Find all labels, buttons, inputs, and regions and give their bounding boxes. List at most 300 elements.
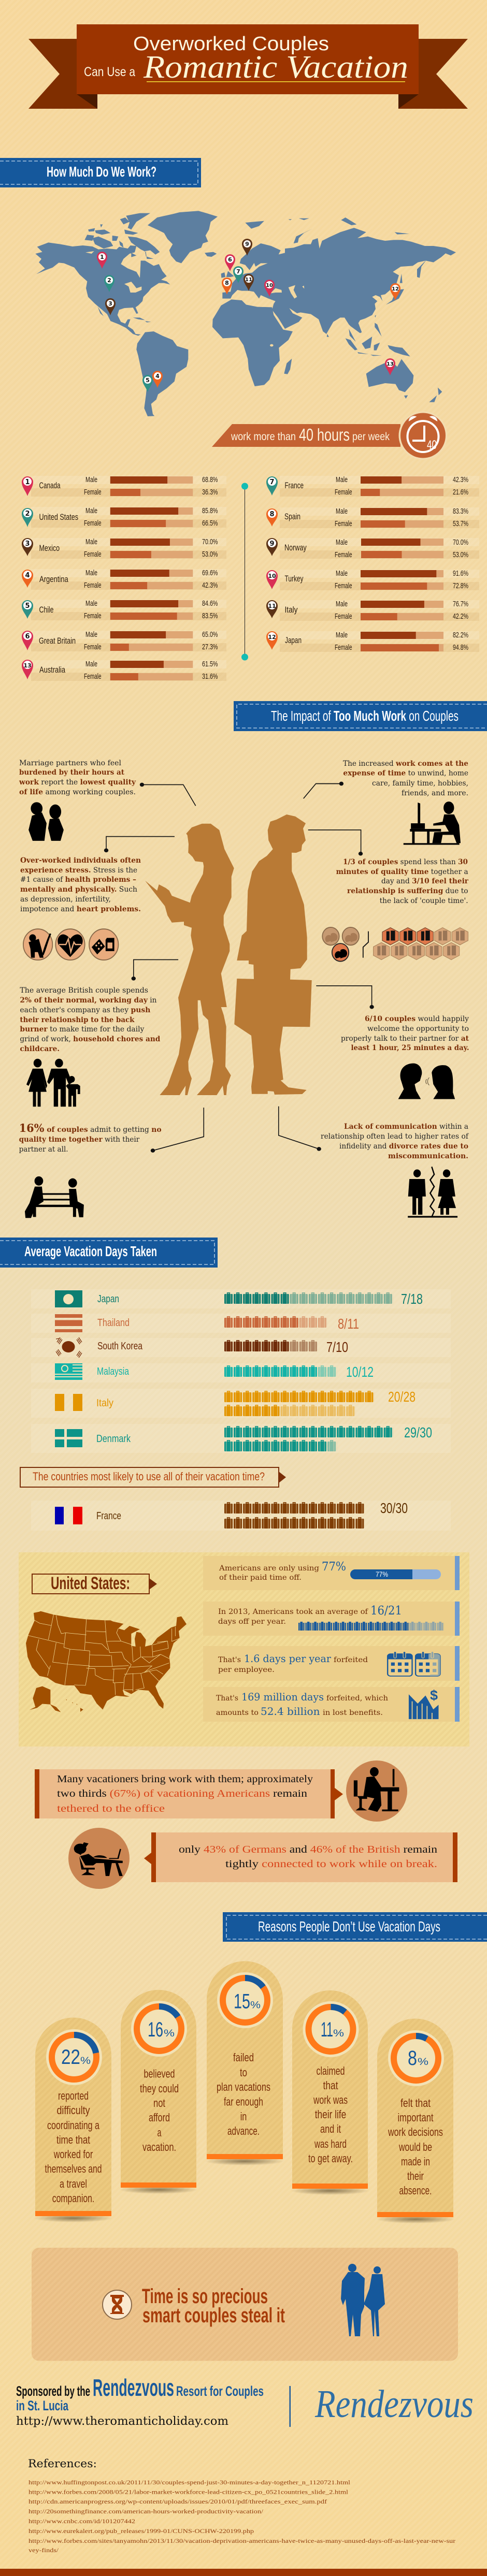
icon: falling chart — [409, 1687, 438, 1719]
text: lack of communication: miscommunication. — [388, 1152, 468, 1160]
heading: reasons people don't use vacation days — [223, 1912, 487, 1942]
arch: 22 percent: themselves and — [45, 2162, 102, 2175]
references: http://www.forbes.com/2008/05/21/labor-market-workforce-lead-citizen-cx_po_0521countries_slide_2.html — [28, 2488, 349, 2496]
arch: 11 percent — [291, 1990, 369, 2195]
map pins: 5 — [146, 377, 150, 384]
panel: male/female hours by country, left column: Female — [84, 519, 102, 528]
row: France: France — [96, 1510, 121, 1522]
row: France — [31, 1500, 451, 1531]
panel: male/female hours by country, right column: Male — [336, 569, 348, 578]
row: Thailand: Thailand — [97, 1317, 130, 1329]
panel: male/female hours by country, left column: Male — [85, 569, 97, 577]
panel: male/female hours by country, left column: Male — [85, 475, 97, 484]
map pins: 6 — [228, 256, 232, 263]
title script: Romantic Vacation — [143, 50, 408, 85]
row: South Korea: 7/10 — [326, 1339, 348, 1355]
arch: 15 percent: plan vacations — [217, 2080, 270, 2093]
text: lack of communication: relationship often lead to higher rates of — [321, 1132, 469, 1141]
arch: 22 percent: time that — [56, 2133, 90, 2146]
icon: calendars — [388, 1652, 440, 1676]
icon: family — [26, 1059, 80, 1107]
card: 1.6 days per year — [203, 1646, 460, 1681]
map: USA — [26, 1611, 187, 1712]
panel: male/female hours by country, right column: 42.2% — [453, 612, 468, 621]
heading: how much do we work — [0, 158, 201, 187]
man figure — [234, 814, 312, 1095]
panel: United States — [19, 1552, 469, 1747]
card: 16 of 21 days: 16/21 — [370, 1604, 402, 1618]
panel: male/female hours by country, right column: Female — [335, 643, 352, 652]
text: british couple: The average British couple spends — [20, 986, 148, 995]
panel: male/female hours by country, left column: 66.5% — [202, 519, 218, 528]
arch: 15 percent: in — [240, 2110, 247, 2123]
icons: stress, heart, pills — [23, 929, 118, 960]
panel: male/female hours by country, left column: Female — [84, 581, 102, 590]
references: http://www.huffingtonpost.co.uk/2011/11/30/couples-spend-just-30-minutes-a-day-together_n_1120721.html — [28, 2479, 351, 2486]
text: british couple — [20, 986, 161, 1053]
map pins: 10 — [266, 283, 273, 288]
panel: male/female hours by country, left column: Australia — [39, 665, 65, 675]
panel: male/female hours by country, left column: 70.0% — [202, 537, 218, 546]
panel: male/female hours by country, right column: Male — [336, 475, 348, 484]
text: british couple: each other's company as they push — [20, 1006, 150, 1014]
arch: 22 percent: difficulty — [57, 2104, 90, 2117]
title ribbon — [28, 24, 468, 109]
panel: male/female hours by country, left column: 83.5% — [202, 612, 218, 620]
panel: male/female hours by country, left column: 36.3% — [202, 488, 218, 497]
text: one third of couples: the lack of 'couple time'. — [380, 897, 468, 905]
text: six of ten couples: welcome the opportunity to — [367, 1025, 469, 1033]
timeline divider — [241, 483, 248, 661]
text: one third of couples: minutes of quality time together a — [336, 868, 468, 876]
arch: 15 percent: failed — [233, 2051, 254, 2064]
text: six of ten couples — [341, 1015, 469, 1052]
world map — [35, 211, 456, 416]
connector lines — [104, 782, 374, 1153]
map pins — [97, 239, 400, 392]
arch: 22 percent: reported — [58, 2089, 89, 2102]
panel: male/female hours by country, left column: 85.8% — [202, 506, 218, 515]
panel: male/female hours by country, left column: 68.8% — [202, 475, 218, 484]
panel: male/female hours by country, left column: Female — [84, 550, 102, 559]
panel: male/female hours by country, right column: 82.2% — [453, 631, 468, 639]
callout: tethered to the office — [35, 1769, 343, 1818]
panel: male/female hours by country, right column: 83.3% — [453, 507, 468, 516]
icon: hourglass — [103, 2290, 132, 2319]
map pins: 1 — [100, 254, 104, 260]
sponsor text: Sponsored by the — [16, 2383, 90, 2399]
references: http://cdn.americanprogress.org/wp-content/uploads/issues/2010/01/pdf/threefaces_exec_sum.pdf — [28, 2498, 327, 2505]
arch: 8 percent: important — [398, 2111, 433, 2124]
arch: 11 percent: % — [333, 2028, 344, 2039]
panel: male/female hours by country, right column — [266, 475, 479, 652]
row: Italy — [31, 1389, 451, 1418]
arch: 8 percent: their — [407, 2170, 424, 2182]
map pins: 9 — [245, 241, 249, 248]
text: stress — [20, 856, 141, 913]
panel: male/female hours by country, left column: 84.6% — [202, 599, 218, 608]
references: vey-finds/ — [28, 2546, 59, 2554]
text: marriage partners: burdened by their hours at — [19, 768, 125, 777]
panel: male/female hours by country, left column: Canada — [39, 481, 61, 490]
panel: male/female hours by country, left column: 3 — [25, 540, 30, 548]
icon: couple walking — [341, 2264, 385, 2336]
arch: 15 percent: to — [240, 2066, 247, 2079]
row: South Korea: South Korea — [97, 1341, 143, 1352]
row: Thailand: 8/11 — [338, 1316, 359, 1332]
40 hours banner — [212, 424, 400, 447]
sponsor text: in St. Lucia — [16, 2398, 69, 2413]
map pins: 11 — [245, 277, 252, 283]
text: increased work — [343, 760, 468, 797]
text: british couple: 2% of their normal, working day in — [20, 996, 156, 1005]
panel: male/female hours by country, left column — [22, 475, 226, 681]
panel: male/female hours by country, right column: France — [285, 481, 304, 490]
panel: male/female hours by country, left column: 69.6% — [202, 569, 218, 577]
panel: male/female hours by country, left column: 1 — [25, 478, 30, 486]
arch: 8 percent: 8 — [408, 2047, 417, 2070]
card: 77 percent of paid time off — [203, 1556, 460, 1590]
panel: male/female hours by country, left column: 6 — [25, 633, 30, 641]
panel: male/female hours by country, right column: 7 — [269, 478, 275, 486]
arch: 11 percent: and it — [320, 2122, 341, 2135]
text: marriage partners: Marriage partners who feel — [19, 759, 122, 767]
card: 16 of 21 days: days off per year. — [218, 1618, 286, 1626]
arch: 11 percent: 11 — [321, 2018, 333, 2041]
arch: 22 percent: a travel — [60, 2177, 87, 2190]
card: 1.6 days per year: forfeited — [334, 1656, 368, 1664]
panel: male/female hours by country, right column: 9 — [269, 540, 275, 548]
panel: male/female hours by country, left column: 27.3% — [202, 643, 218, 651]
arch: 8 percent: felt that — [400, 2097, 431, 2109]
sponsor text — [16, 2374, 264, 2428]
callout: tethered to the office: tethered to the office — [57, 1803, 165, 1814]
arch: 15 percent: 15 — [234, 1990, 250, 2013]
text: one third of couples: day and 3/10 feel their — [381, 877, 469, 885]
panel: male/female hours by country, left column: Argentina — [39, 574, 68, 584]
text: increased work: friends, and more. — [402, 789, 468, 797]
icon: couple on bench — [25, 1176, 84, 1218]
panel: male/female hours by country, left column: Male — [85, 506, 97, 515]
arch: 16 percent: afford — [149, 2111, 170, 2124]
arch: 22 percent: % — [80, 2056, 91, 2066]
references: References: — [28, 2457, 97, 2470]
card: 169 million days forfeited: 52.4 billion — [261, 1705, 320, 1718]
arch: 16 percent: % — [164, 2028, 175, 2039]
arch: 16 percent: vacation. — [142, 2141, 176, 2153]
card: 77 percent of paid time off: of their paid time off. — [219, 1574, 302, 1582]
panel: male/female hours by country, right column: 76.7% — [453, 600, 468, 608]
slogan: smart couples steal it — [142, 2304, 285, 2327]
panel: male/female hours by country, right column: Italy — [285, 605, 298, 615]
panel: male/female hours by country, left column: Female — [84, 672, 102, 681]
panel: male/female hours by country, left column: Great Britain — [39, 636, 76, 646]
panel: male/female hours by country, left column: 2 — [25, 510, 30, 518]
text: marriage partners — [19, 759, 136, 796]
row: Malaysia — [31, 1363, 451, 1382]
arch: 16 percent: 16 — [148, 2018, 163, 2041]
arch: 22 percent: coordinating a — [47, 2119, 100, 2132]
panel: male/female hours by country, right column: Male — [336, 600, 348, 608]
callout: countries most likely: The countries most likely to use all of their vacation time? — [33, 1470, 265, 1483]
heading: how much do we work: How Much Do We Work? — [47, 164, 156, 180]
title line 1: Overworked Couples — [133, 33, 329, 55]
callout: tethered to the office: two thirds (67%) of vacationing Americans remain — [57, 1788, 307, 1799]
row: Denmark: Denmark — [96, 1433, 131, 1445]
text: one third of couples — [336, 858, 469, 905]
row: Italy: 20/28 — [388, 1389, 416, 1405]
map pins: 3 — [108, 300, 112, 307]
text: british couple: childcare. — [20, 1045, 60, 1053]
icon: falling chart: $ — [430, 1687, 438, 1703]
panel: male/female hours by country, right column: 21.6% — [453, 488, 468, 497]
map pins: 7 — [236, 268, 240, 275]
row: France: 30/30 — [380, 1500, 408, 1516]
panel: male/female hours by country, left column: Female — [84, 488, 102, 497]
footer bar — [0, 2569, 487, 2576]
panel: male/female hours by country, right column: Norway — [284, 543, 307, 552]
panel: male/female hours by country, right column: Female — [335, 550, 352, 559]
callout: connected while on break: tightly connected to work while on break. — [225, 1858, 437, 1870]
panel: male/female hours by country, right column: 72.8% — [453, 581, 468, 590]
text: 16 percent: quality time together with their — [19, 1136, 139, 1144]
arch: 11 percent: to get away. — [308, 2152, 353, 2165]
woman figure — [145, 824, 234, 1095]
panel: time is so precious — [32, 2248, 458, 2361]
text: stress: as depression, infertility, — [20, 895, 111, 904]
row: South Korea — [31, 1337, 451, 1358]
row: Thailand — [31, 1314, 451, 1333]
callout: tethered to the office: Many vacationers bring work with them; approximately — [57, 1773, 313, 1785]
arch: 8 percent: % — [418, 2057, 428, 2068]
arch: 15 percent: advance. — [227, 2124, 260, 2137]
arch: 16 percent: not — [153, 2097, 165, 2109]
panel: male/female hours by country, left column: Chile — [39, 605, 54, 615]
card: 16 of 21 days: In 2013, Americans took an average of — [218, 1608, 369, 1616]
callout: United States: United States: — [51, 1574, 130, 1593]
card: 169 million days forfeited — [203, 1687, 460, 1722]
arch: 16 percent: a — [157, 2126, 162, 2139]
text: one third of couples: relationship is suffering due to — [347, 887, 468, 895]
callout: connected while on break: only 43% of Germans and 46% of the British remain — [179, 1844, 437, 1855]
map pins: 4 — [155, 373, 160, 380]
text: british couple: burner to make time for the daily — [20, 1025, 144, 1034]
arch: 11 percent: claimed — [316, 2064, 345, 2077]
40 hours banner: work more than — [231, 431, 296, 443]
map pins: 13 — [386, 361, 394, 367]
panel: male/female hours by country, left column: United States — [39, 512, 78, 522]
row: Japan: Japan — [97, 1293, 119, 1305]
card: 1.6 days per year: per employee. — [218, 1666, 275, 1674]
card: 1.6 days per year: 1.6 days per year — [244, 1652, 331, 1665]
heading: the impact of too much work: The Impact of Too Much Work on Couples — [271, 708, 459, 724]
heading: average vacation days taken: Average Vacation Days Taken — [24, 1243, 157, 1259]
panel: male/female hours by country, right column: Female — [335, 488, 352, 497]
callout: connected while on break — [144, 1832, 457, 1882]
slogan: Time is so precious — [142, 2285, 268, 2308]
text: stress: Over-worked individuals often — [20, 856, 141, 865]
panel: male/female hours by country, right column: 91.6% — [453, 569, 468, 578]
row: Japan: 7/18 — [401, 1291, 423, 1307]
arch: 22 percent: companion. — [52, 2192, 94, 2205]
panel: male/female hours by country, left column: Mexico — [39, 543, 60, 553]
heading: the impact of too much work — [234, 701, 487, 731]
card: 169 million days forfeited: 169 million days — [241, 1691, 324, 1703]
panel: male/female hours by country, left column: 13 — [23, 662, 32, 669]
panel: male/female hours by country, left column: 61.5% — [202, 660, 218, 668]
row: Malaysia: Malaysia — [97, 1366, 130, 1377]
progress bar 77%: 77% — [376, 1570, 388, 1578]
arch: 8 percent: work decisions — [388, 2126, 443, 2138]
panel: male/female hours by country, right column: 42.3% — [453, 475, 468, 484]
panel: male/female hours by country, left column: Female — [84, 612, 102, 620]
icon: couple talking — [398, 1064, 455, 1099]
text: lack of communication: Lack of communication within a — [344, 1123, 468, 1131]
arch: 8 percent — [376, 2018, 455, 2223]
icon: person at computer — [404, 802, 461, 845]
arch: 15 percent: far enough — [224, 2095, 263, 2108]
text: stress: mentally and physically. Such — [20, 885, 137, 894]
text: increased work: The increased work comes at the — [343, 760, 468, 768]
text: 16 percent: partner at all. — [19, 1145, 68, 1154]
text: british couple: their relationship to the back — [20, 1016, 135, 1024]
map pins: 8 — [225, 280, 229, 286]
references: http://20somethingfinance.com/american-hours-worked-productivity-vacation/ — [28, 2508, 264, 2515]
arch: 8 percent: made in — [401, 2155, 430, 2168]
card: 1.6 days per year: That's — [218, 1656, 241, 1664]
panel: male/female hours by country, right column: 11 — [268, 603, 276, 609]
card: 169 million days forfeited: forfeited, which — [326, 1694, 388, 1702]
arch: 15 percent: % — [250, 2000, 261, 2011]
text: six of ten couples: 6/10 couples would happily — [365, 1015, 469, 1023]
row: Malaysia: 10/12 — [346, 1364, 374, 1380]
heading: average vacation days taken — [0, 1238, 218, 1268]
sponsor text: Resort for Couples — [176, 2383, 264, 2399]
panel: male/female hours by country, right column: Spain — [284, 512, 300, 521]
panel: male/female hours by country, right column: 53.7% — [453, 519, 468, 528]
map pins: 12 — [392, 286, 399, 292]
arch: 22 percent: worked for — [53, 2148, 93, 2161]
text: one third of couples: 1/3 of couples spend less than 30 — [343, 858, 468, 866]
panel: male/female hours by country, right column: Female — [335, 581, 352, 590]
panel: male/female hours by country, right column: Male — [336, 631, 348, 639]
references: http://www.eurekalert.org/pub_releases/1999-01/CUNS-OCHW-220199.php — [28, 2527, 254, 2535]
icon: separated couple — [408, 1167, 457, 1218]
panel: male/female hours by country, left column: 31.6% — [202, 672, 218, 681]
panel: male/female hours by country, right column: Male — [336, 538, 348, 547]
text: lack of communication — [321, 1123, 469, 1160]
divider — [289, 2386, 291, 2427]
text: increased work: expense of time to unwind, home — [343, 769, 468, 778]
text: six of ten couples: properly talk to their partner for at — [341, 1035, 469, 1043]
panel: male/female hours by country, right column: 53.0% — [453, 550, 468, 559]
arch: 16 percent — [119, 1990, 198, 2194]
text: stress: experience stress. Stress is the — [20, 866, 137, 875]
row: Denmark: 29/30 — [404, 1424, 432, 1440]
text: increased work: care, family time, hobbies, — [372, 779, 468, 788]
panel: male/female hours by country, left column: 42.3% — [202, 581, 218, 590]
card: 169 million days forfeited: amounts to — [216, 1709, 259, 1717]
text: 16 percent: 16% of couples admit to getting no — [19, 1122, 162, 1134]
row: Denmark — [31, 1424, 451, 1453]
sponsor text: Rendezvous — [93, 2374, 174, 2401]
references: http://www.forbes.com/sites/tanyamohn/2013/11/30/vacation-deprivation-americans-have-twice-as-many-unused-days-off-as-last-year-new-sur — [28, 2537, 455, 2544]
panel: male/female hours by country, left column: 5 — [25, 602, 30, 610]
arch: 11 percent: that — [323, 2079, 338, 2092]
text: marriage partners: of life among working couples. — [19, 788, 136, 796]
text: lack of communication: infidelity and divorce rates due to — [339, 1142, 468, 1151]
references — [28, 2457, 455, 2554]
arch: 11 percent: was hard — [314, 2137, 347, 2150]
panel: male/female hours by country, right column: Turkey — [285, 574, 304, 584]
panel: male/female hours by country, left column: 4 — [25, 572, 30, 579]
panel: male/female hours by country, right column: 94.8% — [453, 643, 468, 652]
text: six of ten couples: least 1 hour, 25 minutes a day. — [351, 1044, 469, 1052]
arch: 8 percent: absence. — [399, 2184, 432, 2197]
card: 169 million days forfeited: in lost benefits. — [323, 1709, 383, 1717]
arch: 15 percent — [205, 1961, 284, 2165]
icon: worker leaning back — [68, 1828, 130, 1889]
icons: coin faces and hexagons showing 1/3 and 3/10 — [322, 927, 468, 962]
panel: male/female hours by country, right column: Male — [336, 507, 348, 516]
panel: male/female hours by country, left column: Male — [85, 599, 97, 608]
card: 169 million days forfeited: That's — [216, 1694, 238, 1702]
arch: 16 percent: believed — [144, 2067, 175, 2080]
title line 2 lead: Can Use a — [84, 65, 135, 79]
arch: 16 percent: they could — [140, 2082, 179, 2095]
arch: 8 percent: would be — [398, 2141, 432, 2153]
icon: couple back to back — [28, 802, 64, 841]
panel: male/female hours by country, right column: 10 — [268, 573, 276, 579]
icon: 40 hour clock: 40 — [427, 438, 437, 452]
map pins: 2 — [107, 277, 111, 284]
panel: male/female hours by country, right column: Female — [335, 519, 352, 528]
card: 16 of 21 days — [203, 1602, 460, 1636]
40 hours banner: per week — [352, 431, 390, 443]
arch: 22 percent — [34, 2018, 113, 2222]
text: 16 percent — [19, 1122, 162, 1154]
panel: male/female hours by country, right column: 12 — [268, 634, 276, 641]
text: stress: impotence and heart problems. — [20, 905, 141, 913]
text: british couple: grind of work, household chores and — [20, 1035, 161, 1043]
arch: 11 percent: work was — [313, 2093, 348, 2106]
text: stress: #1 cause of health problems – — [20, 876, 136, 884]
panel: male/female hours by country, left column: Male — [85, 537, 97, 546]
panel: male/female hours by country, right column: Japan — [285, 635, 302, 645]
panel: male/female hours by country, right column: 70.0% — [453, 538, 468, 547]
references: http://www.cnbc.com/id/101207442 — [28, 2517, 135, 2525]
panel: male/female hours by country, left column: Male — [85, 660, 97, 668]
text: marriage partners: work report the lowest quality — [19, 778, 136, 787]
panel: male/female hours by country, left column: 53.0% — [202, 550, 218, 559]
panel: male/female hours by country, right column: 8 — [269, 511, 275, 518]
panel: male/female hours by country, right column: Female — [335, 612, 352, 621]
callout: countries most likely — [20, 1467, 286, 1487]
arch: 22 percent: 22 — [61, 2046, 80, 2069]
row: Japan — [31, 1289, 451, 1308]
central couple silhouette — [145, 814, 312, 1095]
card: 77 percent of paid time off: Americans are only using — [219, 1564, 319, 1573]
row: Italy: Italy — [96, 1398, 113, 1409]
panel: male/female hours by country, left column: 65.0% — [202, 630, 218, 639]
sponsor text: http://www.theromanticholiday.com — [16, 2415, 228, 2428]
panel: male/female hours by country, left column: Female — [84, 643, 102, 651]
card: 77 percent of paid time off: 77% — [322, 1560, 346, 1574]
40 hours banner: 40 hours — [299, 425, 350, 444]
progress bar 77% — [350, 1569, 441, 1579]
slogan — [142, 2285, 285, 2327]
icon: 40 hour clock — [399, 411, 448, 460]
